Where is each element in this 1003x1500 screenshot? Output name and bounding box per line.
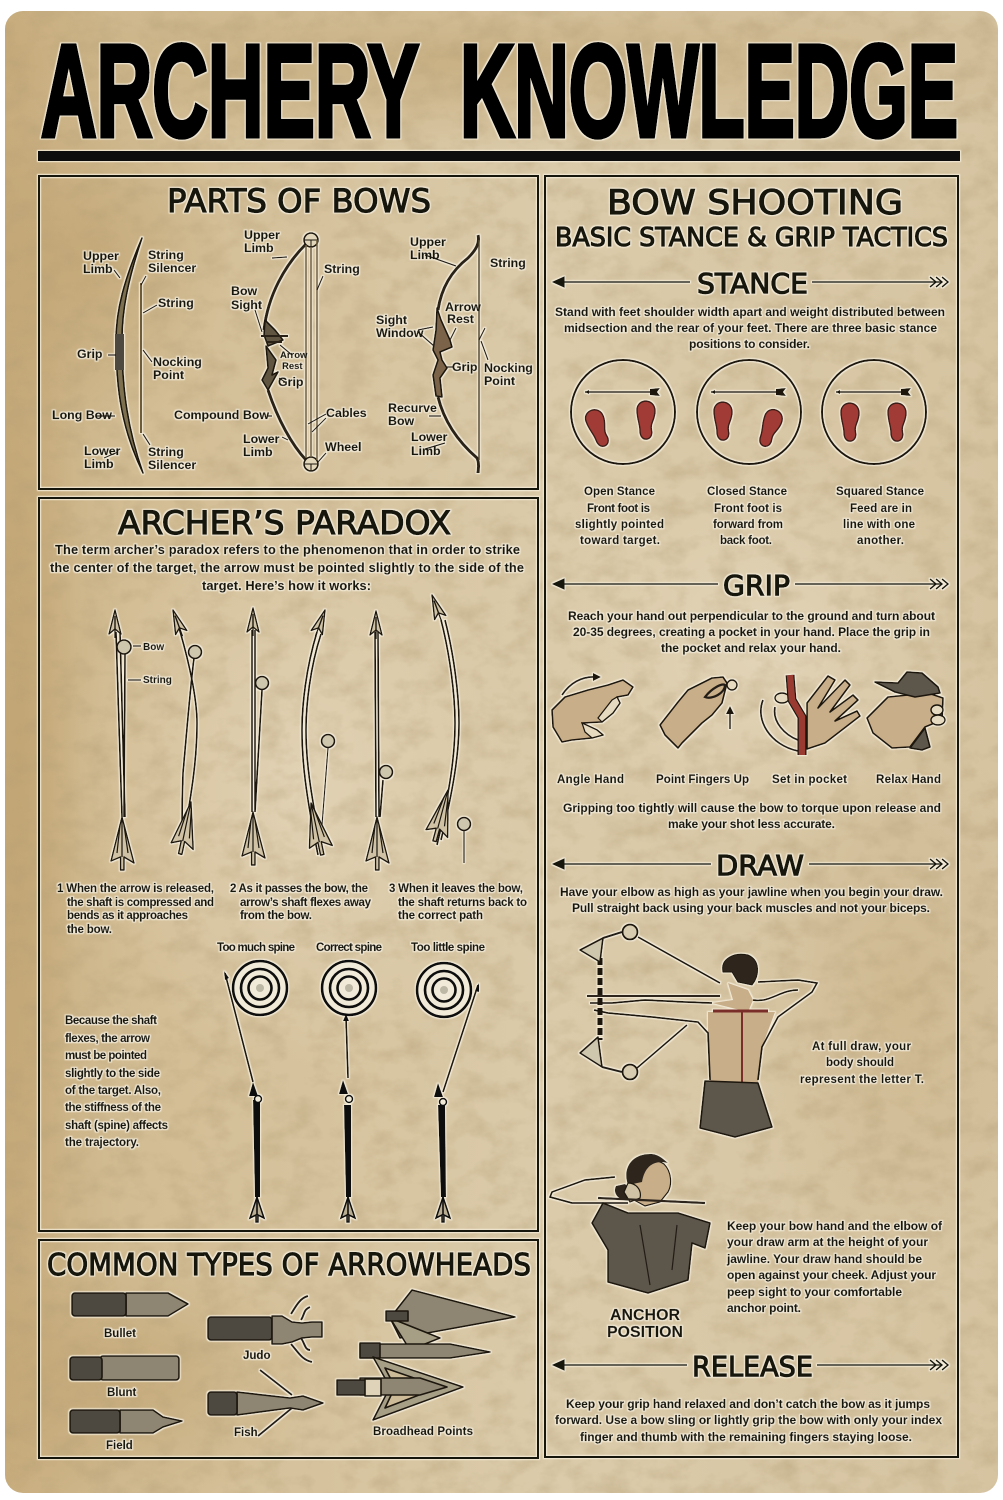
stance text [555,305,945,351]
grip text [568,609,935,655]
diagram: arrow flex stages [109,593,470,870]
arrowhead: bullet: Bullet [104,1328,136,1340]
panel: bow shooting [545,176,958,1457]
panel: common types of arrowheads [39,1240,538,1458]
stance labels: forward from [713,519,783,531]
diagram: compound bow: Limb [243,445,273,459]
arrowhead: bullet [72,1293,188,1340]
side note: shaft flex text: shaft (spine) affects [65,1120,168,1132]
spine labels [217,942,485,954]
section: draw [550,849,948,1341]
figure: anchor position [550,1154,710,1341]
side note: shaft flex text: the stiffness of the [65,1102,161,1114]
diagram: recurve bow [376,235,533,473]
stance text: Stand with feet shoulder width apart and weight distributed between [555,305,945,319]
arrowhead: fish: Fish [234,1427,258,1439]
grip warning text: Gripping too tightly will cause the bow to torque upon release and [563,801,941,815]
diagram: compound bow: Lower [243,432,280,446]
side note: shaft flex text: Because the shaft [65,1015,157,1027]
diagram: recurve bow: Bow [388,414,415,428]
diagram: long bow: Point [153,368,184,382]
grip text: Reach your hand out perpendicular to the ground and turn about [568,609,935,623]
anchor text: Keep your bow hand and the elbow of [727,1219,943,1233]
stance labels: Front foot is [714,503,782,515]
anchor text [726,1219,943,1315]
side note: shaft flex text: of the target. Also, [65,1085,161,1097]
stance labels: Open Stance [584,486,655,498]
diagram: recurve bow: Arrow [445,300,481,314]
stage captions: arrow’s shaft flexes away [240,897,372,909]
stage 3b: shaft returns [424,593,470,863]
icon: set in pocket: Set in pocket [772,774,847,786]
diagram: long bow [52,238,202,473]
arrowhead: field: Field [106,1440,133,1452]
section heading: grip: GRIP [723,569,790,602]
stage 1: arrow released: String [143,675,172,686]
figure: anchor position: POSITION [607,1324,683,1341]
spine labels: Correct spine [316,942,382,954]
diagram: long bow: String [148,248,184,262]
stage captions [57,883,527,936]
diagram: compound bow: Compound Bow [174,408,269,422]
arrow divider: grip [553,579,948,589]
bow in full draw [580,924,720,1080]
arrowhead: blunt: Blunt [107,1387,137,1399]
stage 1b: arrow compressed [167,608,203,856]
arrow divider: draw [553,859,948,869]
diagram: long bow: String [158,296,194,310]
icon: closed stance [697,360,801,464]
stage captions: 3 When it leaves the bow, [389,883,523,895]
heading: archer's paradox: ARCHER’S PARADOX [118,504,451,542]
icon: angle hand [552,673,633,786]
icon: point fingers up [656,677,749,786]
diagram: compound bow: Arrow [280,350,308,361]
diagram: compound bow: Bow [231,284,258,298]
section heading: stance: STANCE [697,267,808,300]
arrowhead: judo [208,1296,322,1362]
diagram: compound bow: Limb [244,241,274,255]
icon: point fingers up: Point Fingers Up [656,774,749,786]
side note: shaft flex text: flexes, the arrow [65,1033,150,1045]
stance text: midsection and the rear of your feet. There are three basic stance [564,321,937,335]
heading: bow shooting: BOW SHOOTING [607,183,903,223]
arrowhead: fish [208,1370,323,1439]
stance labels: Feed are in [850,503,912,515]
anchor text: jawline. Your draw hand should be [726,1252,922,1266]
stance text: positions to consider. [689,337,810,351]
diagram: recurve bow: Point [484,374,515,388]
diagram: compound bow: Sight [231,298,262,312]
diagram: long bow: Nocking [153,355,202,369]
release text: finger and thumb with the remaining fingers staying loose. [580,1430,912,1444]
stage captions: the shaft returns back to [398,897,527,909]
stance labels: back foot. [720,535,772,547]
arrow divider: stance [553,277,948,287]
icon: set in pocket [761,675,860,786]
stage captions: 1 When the arrow is released, [57,883,214,895]
stance labels: slightly pointed [575,519,664,531]
section heading: release: RELEASE [692,1350,813,1383]
diagram: recurve bow: Nocking [484,361,533,375]
full draw note: At full draw, your [812,1041,912,1053]
diagram: recurve bow: Limb [411,444,441,458]
stance labels: toward target. [580,535,660,547]
diagram: compound bow: Upper [244,228,280,242]
draw text: Have your elbow as high as your jawline when you begin your draw. [560,885,943,899]
diagram: compound bow: Rest [282,361,303,372]
spine labels: Too little spine [411,942,485,954]
stage captions: the bow. [67,924,112,936]
draw text [560,885,943,915]
diagram: recurve bow: Grip [452,360,478,374]
stage 3: leaving the bow [366,611,392,870]
diagram: recurve bow: Window [376,326,424,340]
diagram: long bow: Lower [84,444,121,458]
diagram: long bow: Upper [83,249,119,263]
panel: archer's paradox [39,498,538,1231]
figure: full draw archer [580,924,817,1137]
release text: forward. Use a bow sling or lightly grip the bow with only your index [555,1413,942,1427]
diagram: recurve bow: Rest [447,312,474,326]
stage captions: 2 As it passes the bow, the [230,883,368,895]
side note: shaft flex text [65,1015,168,1149]
grip warning text [563,801,941,831]
stance labels: line with one [843,519,915,531]
stage captions: from the bow. [240,910,312,922]
arrowhead: field [70,1410,182,1452]
icon: open stance [571,360,675,464]
heading: parts of bows: PARTS OF BOWS [167,182,431,220]
diagram: recurve bow: Sight [376,313,407,327]
anchor text: your draw arm at the height of your [727,1235,928,1249]
icon: relax hand: Relax Hand [876,774,941,786]
anchor text: anchor point. [727,1301,801,1315]
stage captions: the shaft is compressed and [67,897,214,909]
side note: shaft flex text: must be pointed [65,1050,147,1062]
section: stance [553,267,948,547]
stage 1: arrow released: Bow [143,642,164,653]
anchor text: open against your cheek. Adjust your [727,1268,936,1282]
grip warning text: make your shot less accurate. [668,817,835,831]
diagram: long bow: Silencer [148,458,196,472]
side note: shaft flex text: slightly to the side [65,1068,160,1080]
diagram: recurve bow: Lower [411,430,448,444]
side note: shaft flex text: the trajectory. [65,1137,139,1149]
stance labels: Squared Stance [836,486,924,498]
subheading: BASIC STANCE & GRIP TACTICS [555,223,948,253]
intro text: the center of the target, the arrow must be pointed slightly to the side of the [50,560,524,575]
intro text: target. Here’s how it works: [202,578,371,593]
diagram: long bow: Long Bow [52,408,112,422]
release text [555,1397,942,1444]
diagram: compound bow: String [324,262,360,276]
intro text [50,542,524,593]
grip text: the pocket and relax your hand. [661,641,841,655]
diagram: long bow: Silencer [148,261,196,275]
diagram: long bow: Grip [77,347,103,361]
diagram: compound bow: Wheel [325,440,362,454]
icon: squared stance [822,360,926,464]
section heading: draw: DRAW [716,849,804,882]
icon: relax hand [867,672,945,786]
draw text: Pull straight back using your back muscles and not your biceps. [572,901,930,915]
stance labels: Closed Stance [707,486,787,498]
arrow divider: release [553,1360,948,1370]
arrowhead: blunt [70,1356,179,1399]
panel: parts of bows [39,176,538,489]
spine labels: Too much spine [217,942,295,954]
stance labels [575,486,924,547]
diagram: compound bow [174,228,367,471]
section: release [553,1350,948,1444]
stance labels: another. [857,535,904,547]
diagram: recurve bow: String [490,256,526,270]
heading: arrowheads: COMMON TYPES OF ARROWHEADS [47,1248,531,1283]
full draw note [800,1041,924,1086]
diagram: long bow: Limb [83,262,113,276]
stage captions: the correct path [398,910,483,922]
diagram: recurve bow: Recurve [388,401,437,415]
label: anchor position: ANCHOR [610,1307,680,1324]
diagram: compound bow: Grip [278,375,304,389]
section: grip [552,569,948,831]
stage 2b: shaft flexes away [300,608,334,857]
diagram: long bow: String [148,445,184,459]
arrowhead: judo: Judo [243,1350,270,1362]
stage 1: arrow released [109,610,172,870]
grip text: 20-35 degrees, creating a pocket in your hand. Place the grip in [573,625,930,639]
diagram: recurve bow: Limb [410,248,440,262]
full draw note: represent the letter T. [800,1074,924,1086]
release text: Keep your grip hand relaxed and don’t catch the bow as it jumps [566,1397,930,1411]
full draw note: body should [826,1057,894,1069]
diagram: long bow: Limb [84,457,114,471]
arrowhead: broadhead points: Broadhead Points [373,1426,473,1438]
stage captions: bends as it approaches [67,910,188,922]
diagram: recurve bow: Upper [410,235,446,249]
intro text: The term archer’s paradox refers to the phenomenon that in order to strike [55,542,520,557]
stage 2: passing the bow [242,608,268,865]
diagram: spine targets and arrows [224,961,479,1222]
title: ARCHERY [41,17,419,164]
icon: angle hand: Angle Hand [557,774,624,786]
arrowhead: broadhead points [337,1290,515,1438]
stance labels: Front foot is [587,503,650,515]
diagram: compound bow: Cables [326,406,367,420]
anchor text: peep sight to your comfortable [727,1285,902,1299]
